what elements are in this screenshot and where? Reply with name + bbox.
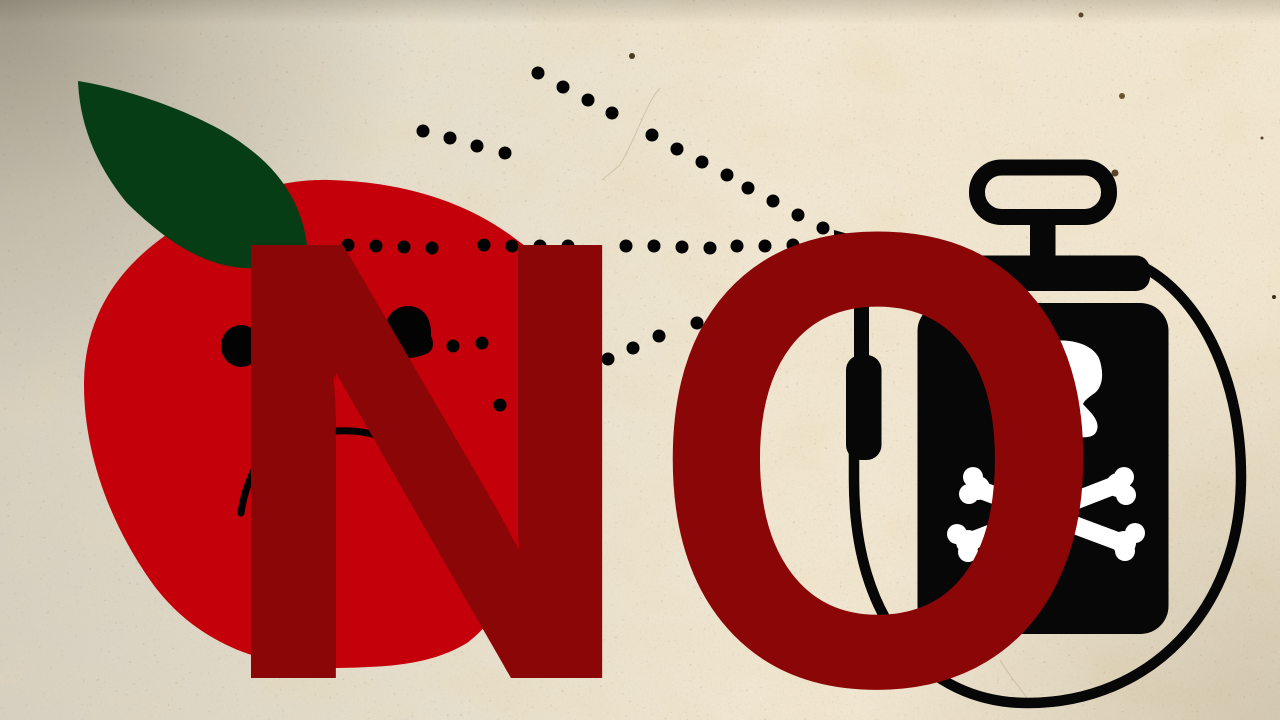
spray wand tip — [834, 230, 870, 260]
tank — [918, 303, 1168, 634]
sprayer top bar — [960, 256, 1150, 291]
right eye — [385, 306, 433, 359]
cheek line — [241, 470, 254, 513]
sprayer neck — [1030, 215, 1056, 260]
frown — [335, 431, 376, 435]
skull — [1020, 340, 1102, 437]
apple leaf — [78, 81, 307, 268]
hose — [854, 268, 1241, 703]
icon: poison sprayer — [834, 168, 1241, 703]
nozzle pipe — [854, 300, 869, 360]
crossbones — [947, 467, 1145, 562]
left eye — [221, 325, 261, 367]
sprayer handle — [977, 168, 1109, 217]
apple body — [84, 180, 595, 668]
icon: sad red apple — [78, 81, 595, 668]
spray droplets — [342, 66, 830, 412]
heading: NO — [251, 232, 1084, 690]
skull and crossbones — [947, 340, 1145, 562]
nozzle grip — [846, 355, 882, 460]
